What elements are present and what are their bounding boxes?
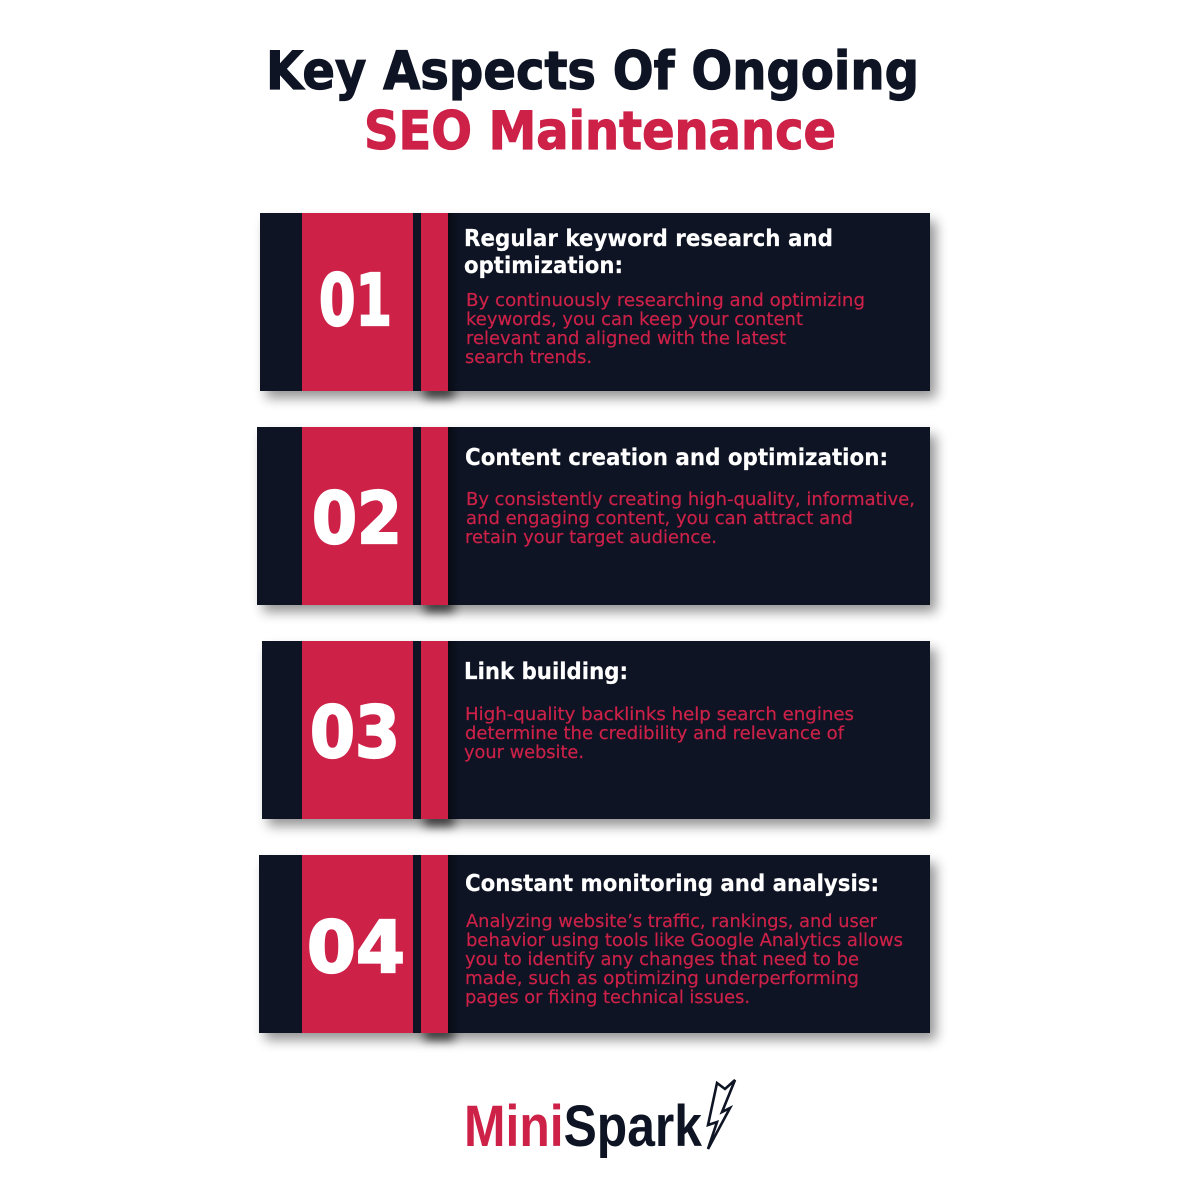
number 02: 02 (312, 477, 402, 560)
title line 2: SEO Maintenance (364, 101, 836, 162)
panel: 03 link building (262, 641, 936, 826)
body text 04: pages or fixing technical issues. (465, 987, 750, 1008)
body text 01: keywords, you can keep your content (466, 309, 803, 330)
number 03: 03 (310, 691, 400, 774)
body text 04: you to identify any changes that need to be (465, 949, 859, 970)
number 04: 04 (307, 906, 405, 989)
heading 01: Regular keyword research and (464, 226, 833, 252)
body text 04 (465, 911, 903, 1008)
heading 02: Content creation and optimization: (465, 445, 888, 471)
heading 03: Link building: (464, 659, 628, 685)
body text 02 (465, 489, 915, 548)
body text 02: By consistently creating high-quality, informative, (466, 489, 915, 510)
number 01: 01 (319, 259, 392, 342)
body text 02: retain your target audience. (465, 527, 717, 548)
body text 03 (464, 704, 854, 763)
body text 01 (465, 290, 865, 368)
title (266, 41, 919, 162)
heading 04: Constant monitoring and analysis: (465, 871, 879, 897)
logo wordmark: MiniSpark (464, 1094, 703, 1159)
body text 01: search trends. (465, 347, 592, 368)
body text 01: By continuously researching and optimizing (466, 290, 865, 311)
panel: 01 keyword research (260, 213, 936, 398)
heading 01: optimization: (464, 253, 623, 279)
body text 04: made, such as optimizing underperforming (465, 968, 859, 989)
panel: 02 content creation (257, 427, 936, 612)
body text 04: behavior using tools like Google Analytics allows (466, 930, 903, 951)
panel: 04 monitoring and analysis (259, 855, 936, 1040)
logo: MiniSpark (464, 1080, 735, 1159)
body text 04: Analyzing website’s traffic, rankings, and user (466, 911, 878, 932)
body text 03: your website. (464, 742, 584, 763)
title line 1: Key Aspects Of Ongoing (266, 41, 919, 102)
body text 03: determine the credibility and relevance of (465, 723, 845, 744)
body text 03: High-quality backlinks help search engines (465, 704, 854, 725)
body text 01: relevant and aligned with the latest (466, 328, 786, 349)
icon: lightning bolt (708, 1080, 735, 1149)
heading 01 (464, 226, 833, 279)
body text 02: and engaging content, you can attract and (466, 508, 853, 529)
